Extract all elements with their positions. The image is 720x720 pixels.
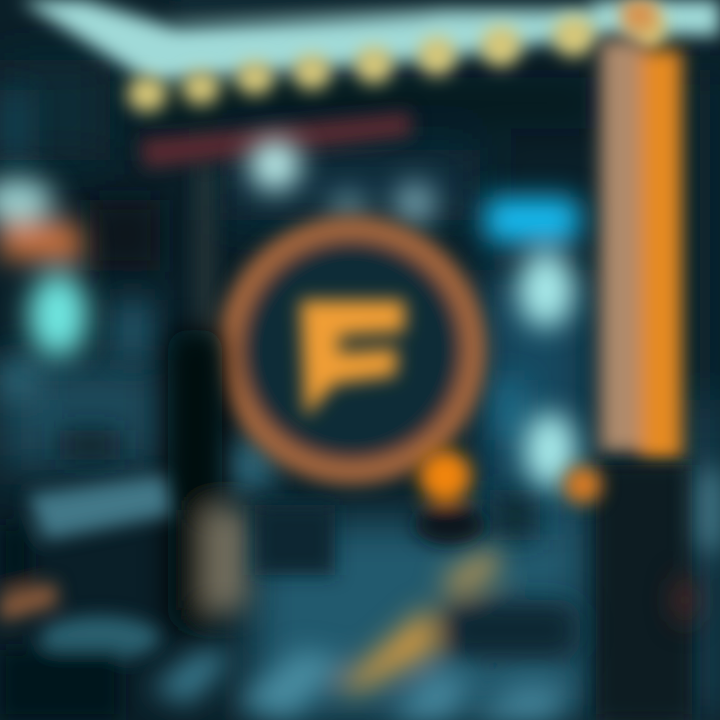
orange and tan column <box>600 0 682 460</box>
ceiling light band <box>20 0 720 82</box>
left shelves <box>0 475 335 720</box>
floor shapes <box>150 470 720 720</box>
column base <box>596 465 692 720</box>
dark figure <box>168 330 247 630</box>
left wall lights <box>0 178 88 357</box>
glowing panels <box>249 139 580 488</box>
red beam <box>140 112 412 340</box>
letter F logo <box>300 300 405 418</box>
ceiling lamps <box>127 9 666 112</box>
mottled wall blocks <box>0 90 540 540</box>
magnifier ring <box>230 228 474 472</box>
orange orbs <box>414 450 602 545</box>
